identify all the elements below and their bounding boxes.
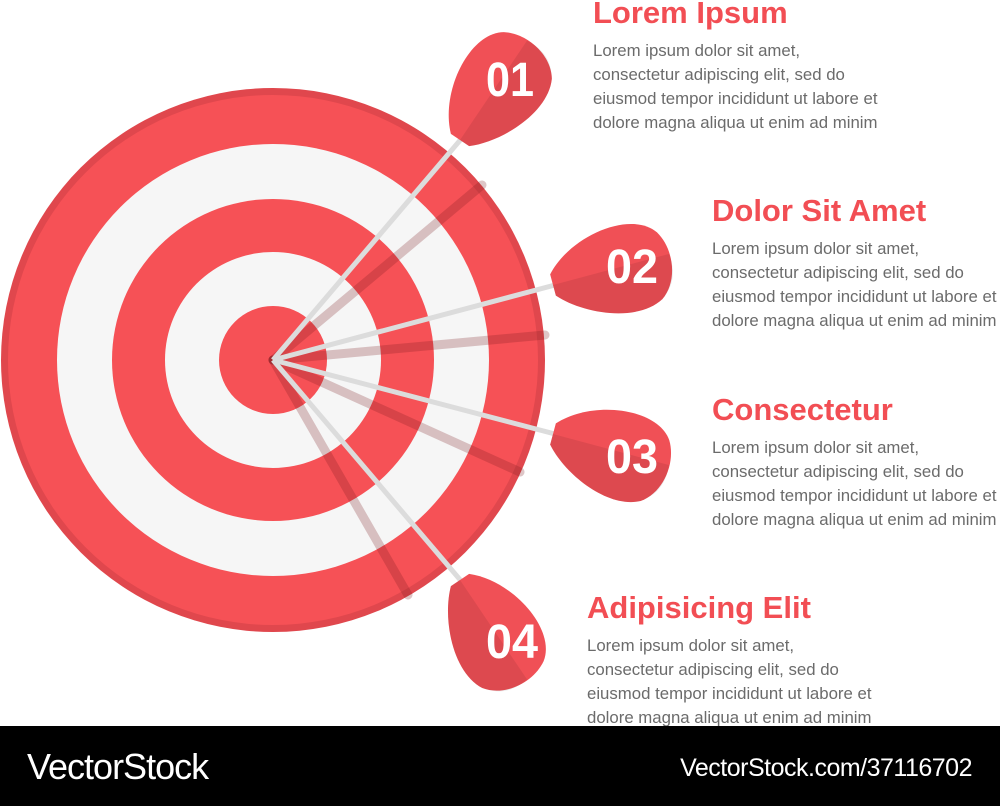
text block 4: Adipisicing Elit	[587, 590, 811, 625]
footer bar: VectorStock	[27, 746, 208, 787]
text block 3: Lorem ipsum dolor sit amet,	[712, 438, 919, 457]
text block 4: dolore magna aliqua ut enim ad minim	[587, 708, 872, 727]
text block 2: Lorem ipsum dolor sit amet,	[712, 239, 919, 258]
text block 2: eiusmod tempor incididunt ut labore et	[712, 287, 997, 306]
text block 3: Consectetur	[712, 392, 893, 427]
dart 04	[273, 360, 562, 707]
text block 2	[712, 193, 997, 330]
footer bar	[0, 726, 1000, 806]
text block 2: consectetur adipiscing elit, sed do	[712, 263, 964, 282]
dart shadows	[273, 185, 545, 595]
text block 2: Dolor Sit Amet	[712, 193, 926, 228]
text block 2: dolore magna aliqua ut enim ad minim	[712, 311, 997, 330]
text block 4: consectetur adipiscing elit, sed do	[587, 660, 839, 679]
text block 1: eiusmod tempor incididunt ut labore et	[593, 89, 878, 108]
text block 4: eiusmod tempor incididunt ut labore et	[587, 684, 872, 703]
text block 1: dolore magna aliqua ut enim ad minim	[593, 113, 878, 132]
dart 01: 01	[486, 54, 534, 107]
dart 02: 02	[606, 241, 658, 294]
dart 01	[273, 17, 567, 360]
text block 1: Lorem ipsum dolor sit amet,	[593, 41, 800, 60]
dart 04: 04	[486, 616, 538, 669]
target	[1, 88, 545, 632]
dart 03	[273, 360, 680, 511]
text block 4	[587, 590, 872, 727]
text block 1: consectetur adipiscing elit, sed do	[593, 65, 845, 84]
text block 3: dolore magna aliqua ut enim ad minim	[712, 510, 997, 529]
text block 3	[712, 392, 997, 529]
text block 1	[593, 0, 878, 132]
text block 3: eiusmod tempor incididunt ut labore et	[712, 486, 997, 505]
dart 03: 03	[606, 431, 658, 484]
dart 02	[273, 214, 682, 360]
footer bar: VectorStock.com/37116702	[680, 754, 972, 782]
text block 3: consectetur adipiscing elit, sed do	[712, 462, 964, 481]
text block 4: Lorem ipsum dolor sit amet,	[587, 636, 794, 655]
